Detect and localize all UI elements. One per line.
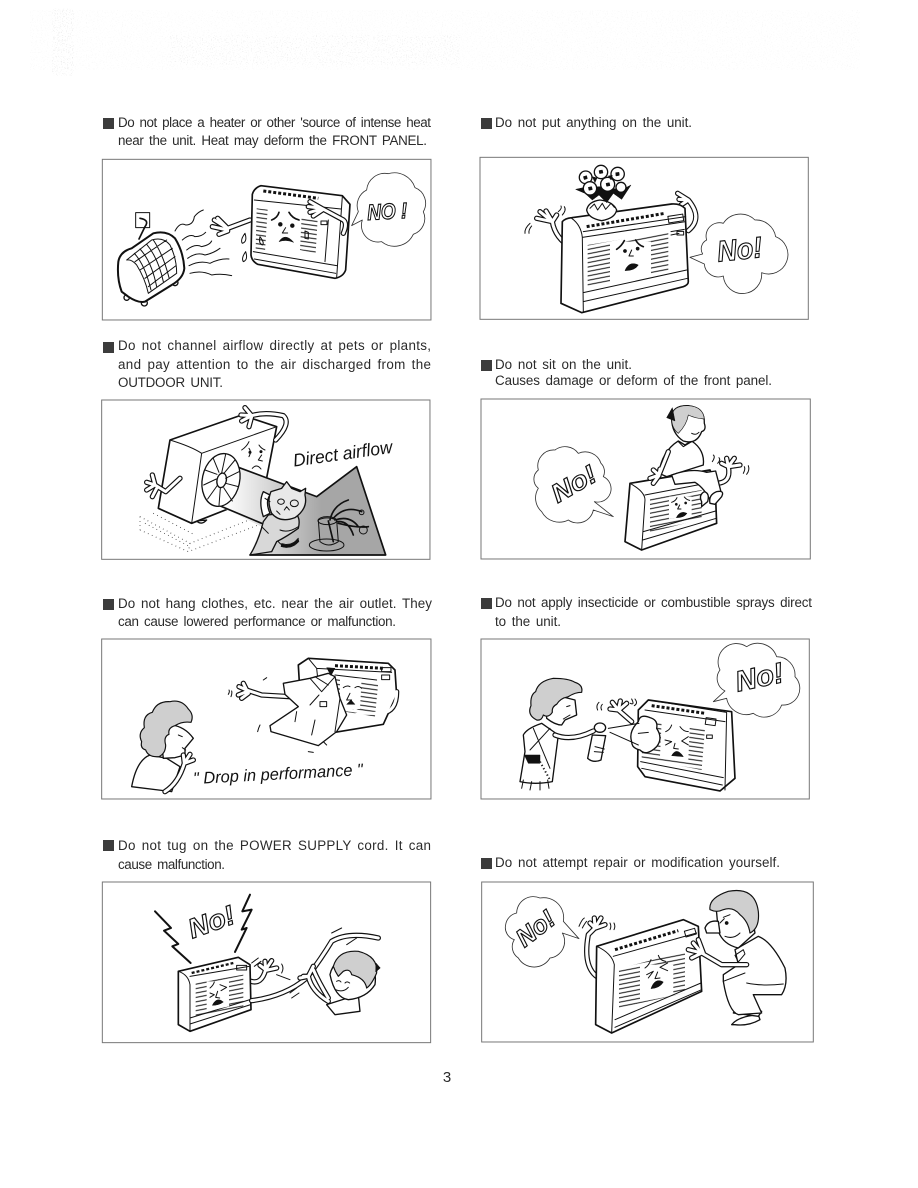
illustration panel: tugging power cord: No! xyxy=(184,899,239,944)
bullet xyxy=(103,599,114,610)
illustration panel: outdoor unit airflow xyxy=(102,400,430,559)
speech bubble: No! xyxy=(690,214,788,294)
woman xyxy=(520,678,593,790)
instruction text: Do not tug on the POWER SUPPLY cord. It can xyxy=(118,838,431,853)
illustration panel: spray at unit xyxy=(481,639,809,799)
section: do not place a heater xyxy=(102,115,431,320)
speech bubble: NO!: NO ! xyxy=(367,198,408,225)
speech bubble: No! xyxy=(713,643,800,717)
flower bouquet xyxy=(576,165,631,203)
airflow wedge xyxy=(210,467,387,555)
bullet xyxy=(103,840,114,851)
bullet xyxy=(481,598,492,609)
speech bubble: No!: No! xyxy=(716,231,764,269)
page number: 3 xyxy=(443,1069,451,1086)
instruction text: and pay attention to the air discharged from the xyxy=(118,357,431,372)
speech bubble: No!: No! xyxy=(546,459,602,509)
illustration panel: clothes on unit xyxy=(102,639,431,799)
concrete base xyxy=(140,513,262,552)
illustration panel: man repairing unit xyxy=(482,882,813,1042)
instruction text: Do not apply insecticide or combustible sprays direct xyxy=(495,595,812,610)
section: do not tug on the cord xyxy=(102,838,431,1043)
boy xyxy=(300,951,380,1015)
bullet xyxy=(481,858,492,869)
illustration panel: tugging power cord xyxy=(102,882,431,1043)
spray cloud xyxy=(608,716,660,753)
bullet xyxy=(103,118,114,129)
lightning bolts xyxy=(155,895,252,963)
illustration panel: flower vase on unit xyxy=(480,157,808,319)
hand lettered label: Direct airflow: Direct airflow xyxy=(292,437,395,471)
illustration panel: boy sitting on unit xyxy=(481,399,810,559)
instruction text: Causes damage or deform of the front panel. xyxy=(495,373,772,388)
bullet xyxy=(481,360,492,371)
section: do not sit on the unit xyxy=(481,357,810,559)
speech bubble: No!: No! xyxy=(511,905,561,953)
instruction text: Do not place a heater or other 'source of intense heat xyxy=(118,115,431,130)
speech bubble: No! xyxy=(505,897,579,967)
instruction text: Do not channel airflow directly at pets or plants, xyxy=(118,338,431,353)
cat xyxy=(250,482,306,555)
instruction text: to the unit. xyxy=(495,614,561,629)
instruction text: cause malfunction. xyxy=(118,857,225,872)
hand lettered label: Drop in performance: " Drop in performance " xyxy=(193,760,364,788)
man xyxy=(688,890,786,1025)
bullet xyxy=(481,118,492,129)
instruction text: OUTDOOR UNIT. xyxy=(118,375,223,390)
boy xyxy=(650,406,723,507)
section: do not hang clothes xyxy=(102,596,432,799)
speech bubble: No! xyxy=(534,447,613,523)
instruction text: Do not attempt repair or modification yourself. xyxy=(495,855,780,870)
power cord xyxy=(252,935,378,1001)
instruction text: Do not sit on the unit. xyxy=(495,357,632,372)
section: do not attempt repair xyxy=(481,855,813,1042)
section: do not apply insecticide xyxy=(481,595,812,799)
potted plant xyxy=(309,500,368,551)
instruction text: near the unit. Heat may deform the FRONT PANEL. xyxy=(118,133,427,148)
shirt xyxy=(270,668,347,746)
section: do not put anything on the unit xyxy=(480,115,808,319)
section: do not channel airflow xyxy=(102,338,431,559)
speech bubble: No!: No! xyxy=(732,657,787,699)
spray can xyxy=(588,723,606,761)
speech bubble: NO! xyxy=(352,173,426,246)
bullet xyxy=(103,342,114,353)
instruction text: Do not hang clothes, etc. near the air outlet. They xyxy=(118,596,432,611)
instruction text: can cause lowered performance or malfunction. xyxy=(118,614,396,629)
illustration panel: heater and unit xyxy=(102,159,431,320)
faint scanned header speckle xyxy=(30,8,860,76)
instruction text: Do not put anything on the unit. xyxy=(495,115,692,130)
woman xyxy=(132,701,193,792)
